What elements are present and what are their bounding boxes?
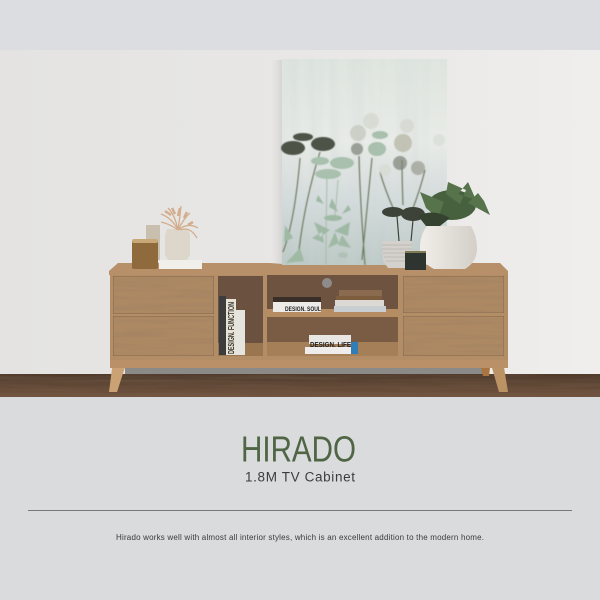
dark flowers behind pot <box>382 207 425 221</box>
dark stems <box>283 152 425 265</box>
stacked books lower <box>305 335 358 354</box>
central lower shelf compartment <box>267 317 398 355</box>
top surface <box>109 263 508 275</box>
carcass <box>110 272 508 360</box>
top grey band <box>0 0 600 50</box>
pale green stems <box>326 175 338 265</box>
central upper shelf compartment <box>267 275 398 310</box>
left upper drawer <box>113 276 214 314</box>
decor: striped bowl, dark jar and plant in white pot <box>382 182 490 270</box>
wooden floor <box>0 374 600 398</box>
base rail <box>110 359 508 368</box>
front left leg <box>109 361 127 392</box>
amber jar <box>132 240 158 269</box>
shelf <box>267 309 398 317</box>
dark flowers <box>281 133 335 155</box>
left compartment <box>218 276 263 356</box>
dark jar <box>405 251 426 270</box>
cable hole <box>322 278 332 288</box>
plant foliage <box>418 182 490 226</box>
TV cabinet <box>109 263 508 392</box>
dotted seed heads <box>350 113 445 176</box>
right lower drawer <box>403 316 504 356</box>
decor: candle jar, vase, dried stems and book <box>132 206 202 269</box>
striped bowl <box>382 241 412 268</box>
bottom grey panel <box>0 397 600 600</box>
dried stems <box>161 206 198 238</box>
stacked books lower: DESIGN. LIFE <box>310 342 351 349</box>
divider <box>28 510 572 511</box>
wall <box>0 50 600 375</box>
subtitle: 1.8M TV Cabinet <box>245 470 355 484</box>
left lower drawer <box>113 316 214 356</box>
stacked books upper left <box>273 297 321 313</box>
front right leg <box>490 361 508 392</box>
upright books <box>219 296 245 355</box>
back right leg <box>481 368 490 376</box>
stacked books upper right <box>334 290 386 312</box>
description: Hirado works well with almost all interior styles, which is an excellent addition to the modern home. <box>116 533 484 542</box>
upright books: DESIGN. FUNCTION <box>227 302 236 354</box>
title: HIRADO <box>241 428 356 470</box>
white pot <box>420 226 477 269</box>
painted botanicals <box>281 113 445 265</box>
stacked books upper left: DESIGN. SOUL <box>285 306 321 313</box>
shadow under cabinet <box>125 368 485 374</box>
vase <box>165 229 190 260</box>
pillar candle <box>146 225 160 260</box>
white book <box>159 260 202 269</box>
dark stems to bowl <box>397 216 413 252</box>
pale green flowers <box>311 131 388 179</box>
leaves at canvas foot <box>284 195 351 263</box>
painting: botanical canvas <box>270 59 447 265</box>
right upper drawer <box>403 276 504 313</box>
